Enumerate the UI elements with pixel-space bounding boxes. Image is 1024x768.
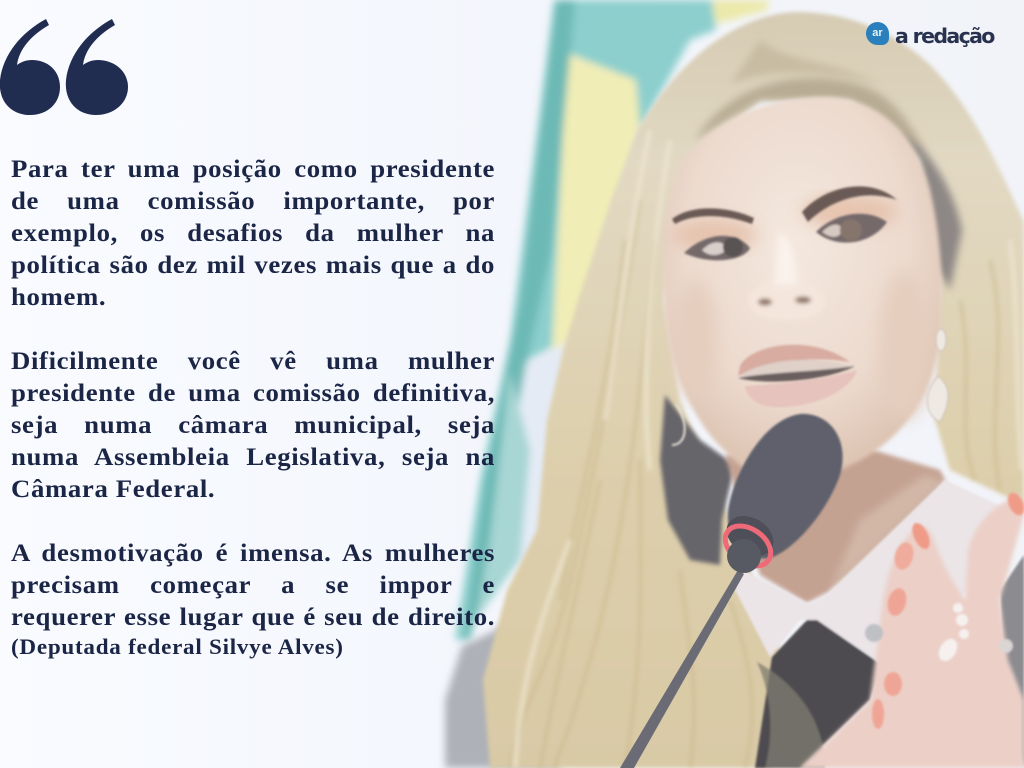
face <box>663 97 942 483</box>
cheek shade <box>673 270 931 420</box>
quote text: Para ter uma posição como presidente <box>11 154 495 183</box>
quote text: seja numa câmara municipal, seja <box>11 410 495 439</box>
quote text: (Deputada federal Silvye Alves) <box>11 634 344 659</box>
dark area beneath jaw <box>660 395 735 565</box>
earrings <box>672 329 948 445</box>
mouth <box>738 345 857 407</box>
eyeshadow <box>673 195 898 251</box>
microphone <box>620 414 843 768</box>
collar <box>735 480 1010 768</box>
quote text: requerer esse lugar que é seu de direito. <box>11 602 495 631</box>
dark blouse <box>755 620 882 768</box>
brows, eyes <box>672 186 897 260</box>
nose <box>749 227 825 320</box>
quote text <box>11 154 495 659</box>
nails and rings <box>865 490 1024 729</box>
quote text: política são dez mil vezes mais que a do <box>11 250 495 279</box>
quote text: homem. <box>11 282 106 311</box>
quote text: Câmara Federal. <box>11 474 215 503</box>
hair strands <box>510 200 1000 768</box>
quote text: Dificilmente você vê uma mulher <box>11 346 495 375</box>
logo icon: ar <box>872 27 883 39</box>
hair back <box>483 12 1024 768</box>
hand <box>800 495 1024 768</box>
neck <box>725 440 945 603</box>
dark hair at temple and parting <box>695 40 962 290</box>
quote text: de uma comissão importante, por <box>11 186 495 215</box>
quote text: exemplo, os desafios da mulher na <box>11 218 495 247</box>
jacket back <box>445 600 560 768</box>
quote text: precisam começar a se impor e <box>11 570 495 599</box>
logo: a redação: a redação <box>895 24 994 48</box>
quote text: A desmotivação é imensa. As mulheres <box>11 538 495 567</box>
logo icon <box>866 22 889 45</box>
quote text: numa Assembleia Legislativa, seja na <box>11 442 495 471</box>
flag <box>455 0 768 640</box>
icon: opening quotation mark <box>0 19 128 115</box>
quote text: presidente de uma comissão definitiva, <box>11 378 495 407</box>
